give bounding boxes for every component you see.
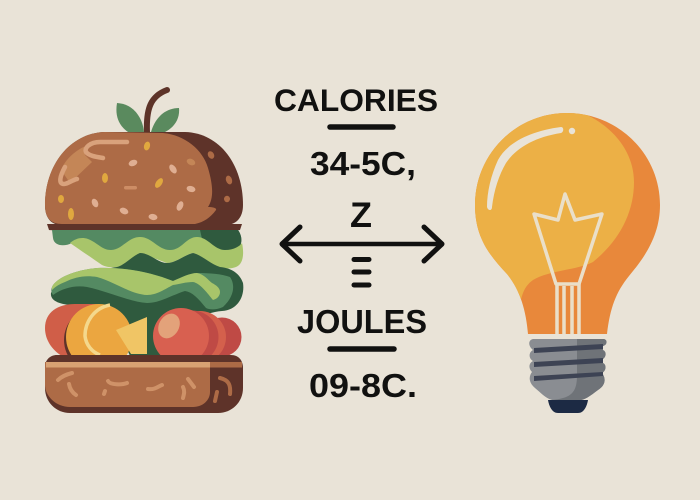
divider under joules [330,346,394,352]
highlight [487,127,575,210]
symbol: three bars [354,260,369,285]
symbol: Z: Z [350,196,372,235]
cheese wedge [116,317,147,354]
bulb glass [470,110,665,336]
icon: light bulb [470,110,665,413]
double-headed arrow [282,227,442,261]
sesame seeds [58,141,165,220]
lower lettuce [51,253,243,356]
heading: joules: JOULES [297,303,427,340]
calories value: 34-5C, [310,145,416,182]
divider under calories [330,124,393,130]
stem and leaves [116,90,179,132]
bottom bun [45,355,243,413]
upper lettuce [52,230,243,268]
infographic canvas [45,87,660,413]
top bun [45,132,243,225]
plate layer [47,224,242,231]
icon: burger [45,90,243,413]
filament [534,194,602,334]
tomato and cheese filling [45,303,242,355]
joules value: 09-8C. [309,367,417,404]
screw base [529,339,607,413]
heading: calories: CALORIES [274,82,438,118]
